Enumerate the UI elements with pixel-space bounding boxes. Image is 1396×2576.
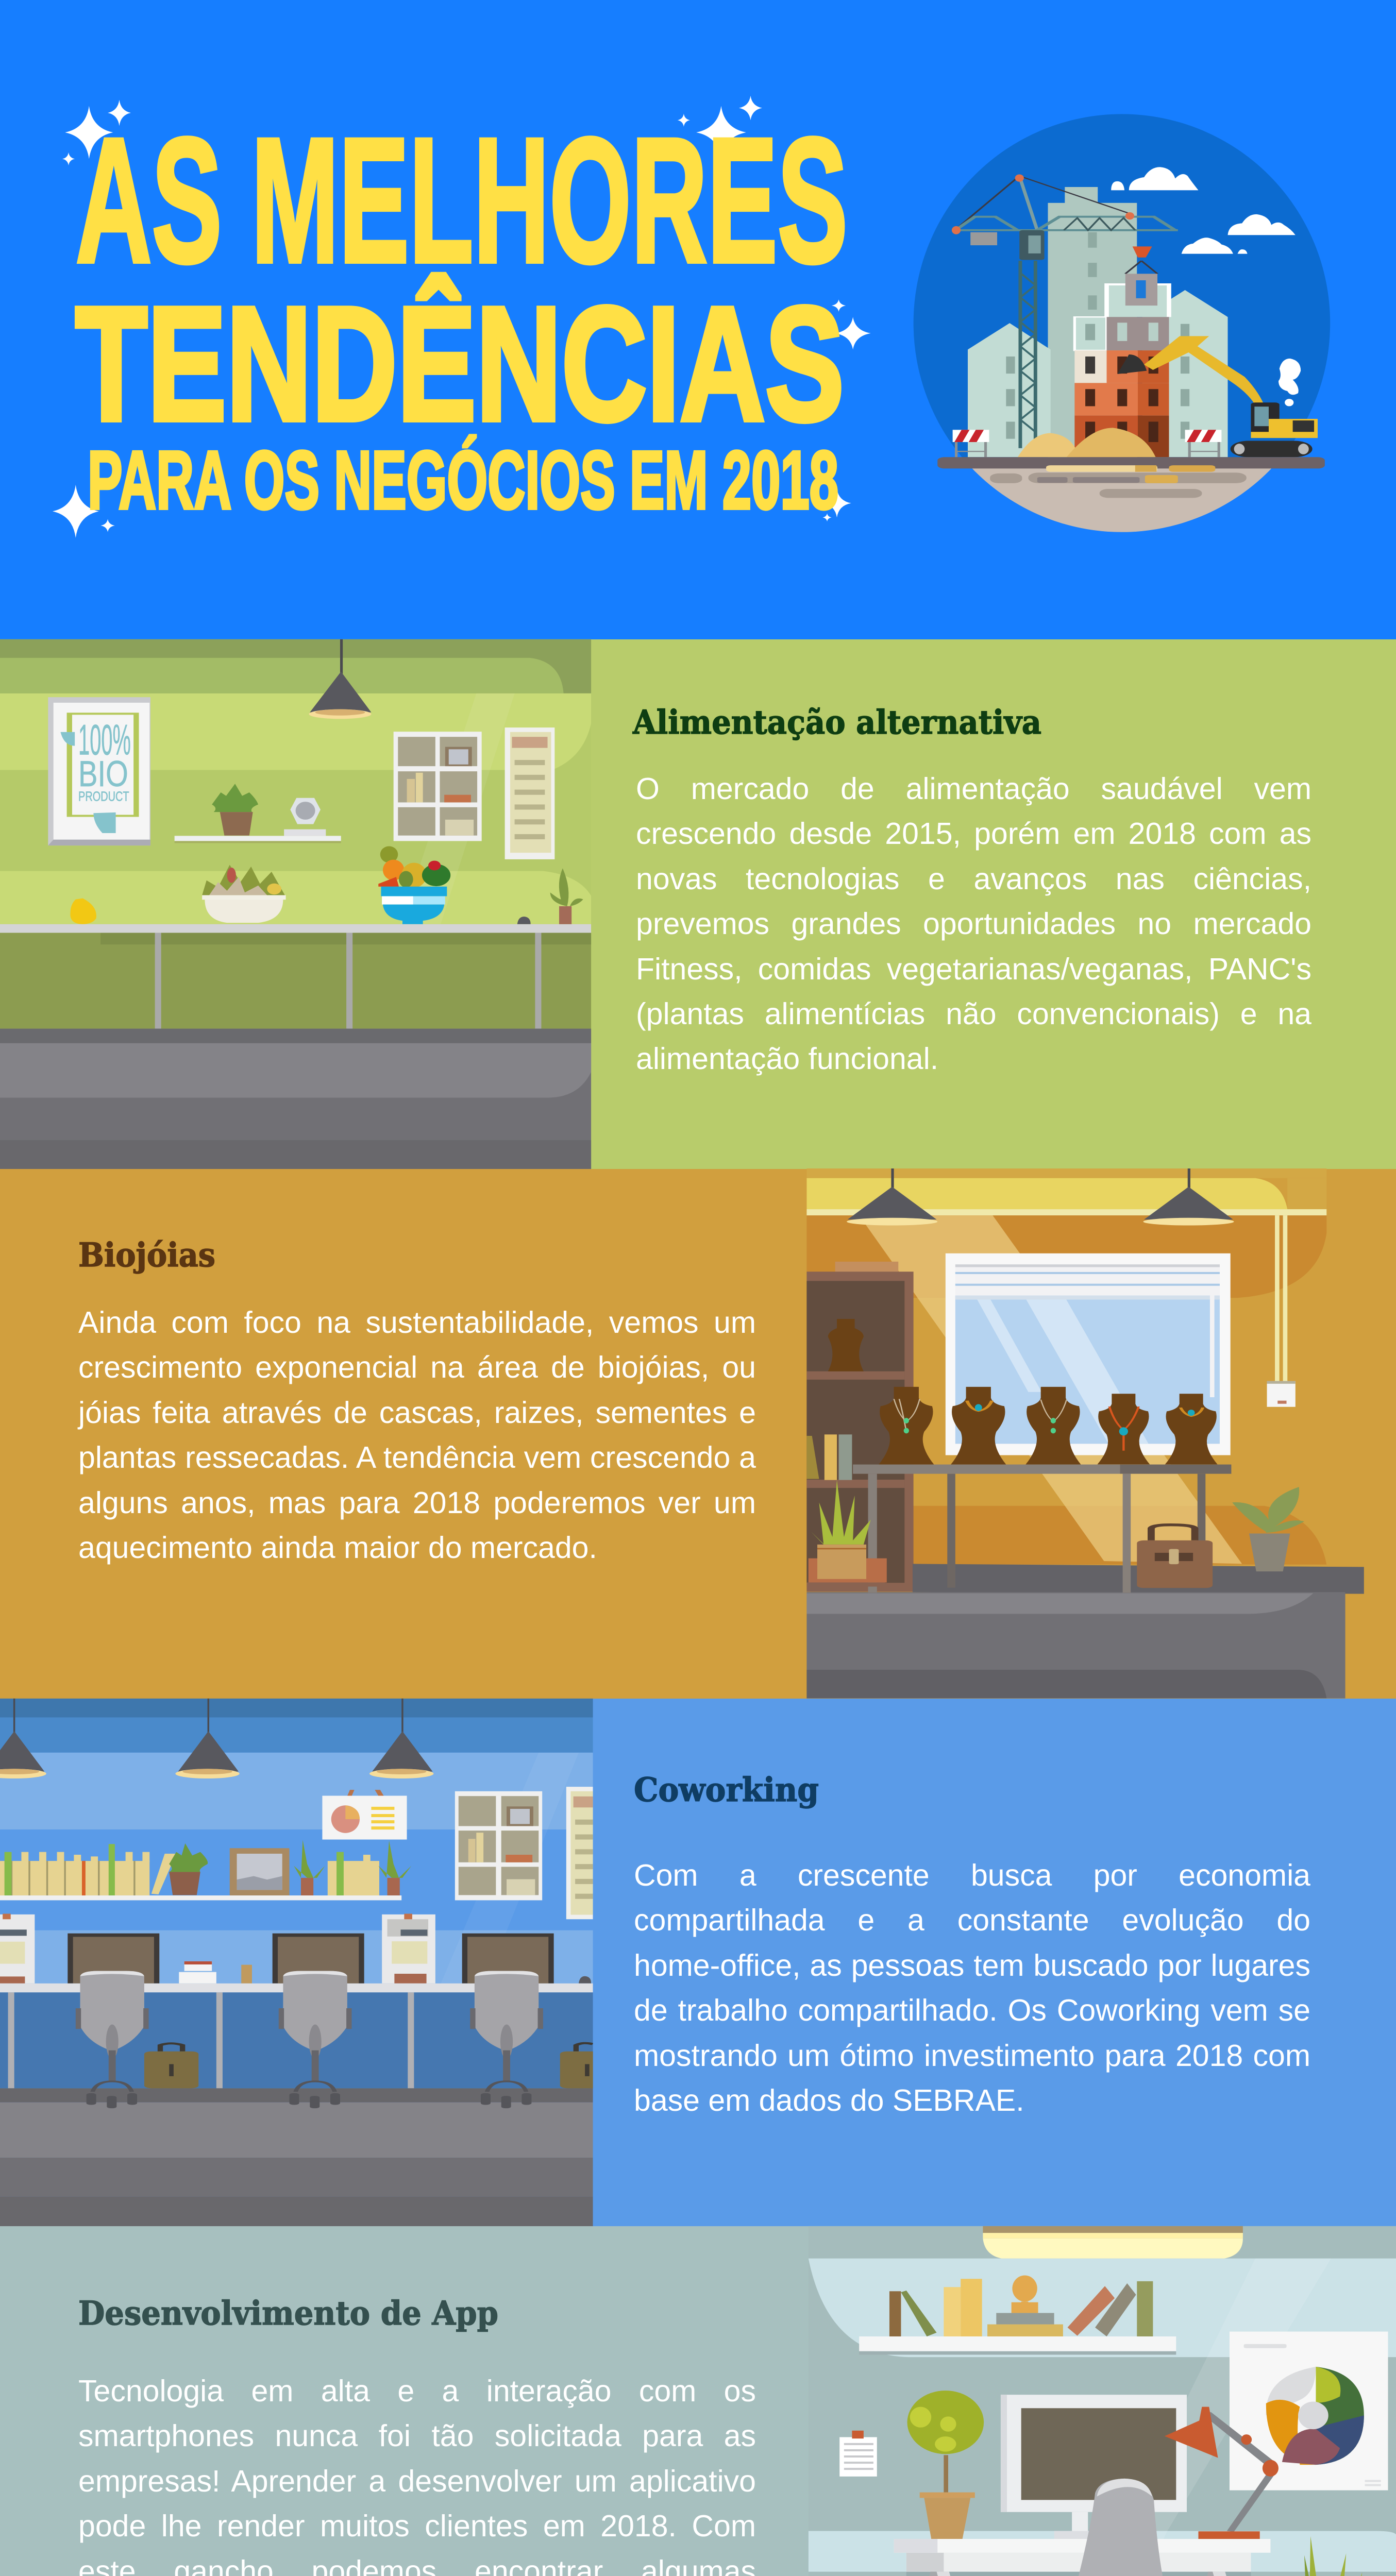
ground platform (937, 457, 1325, 468)
lemon (70, 899, 96, 924)
crane (954, 176, 1178, 448)
chairs (76, 1971, 543, 2108)
title: AS MELHORES (76, 101, 848, 300)
section: Desenvolvimento de App (0, 2226, 1396, 2576)
title: PARA OS NEGÓCIOS EM 2018 (88, 434, 838, 526)
pendant lamp (309, 639, 371, 719)
topiary (907, 2391, 984, 2539)
color wheel poster (1230, 2332, 1388, 2490)
poster: 100% bio product (48, 697, 150, 845)
salad bowl (202, 865, 286, 923)
heading: Desenvolvimento de App: Desenvolvimento de App (78, 2294, 498, 2333)
text block: Coworking: Com a crescente busca por economia (634, 1858, 1310, 1892)
text block: Alimentação alternativa: (plantas alimentícias não convencionais) e na (636, 997, 1311, 1031)
shelf with plant and ornament (175, 784, 341, 843)
heading: Biojóias: Biojóias (78, 1236, 215, 1275)
text block: Coworking: mostrando um ótimo investimento para 2018 com (634, 2039, 1310, 2073)
window (946, 1253, 1231, 1455)
illustration: food counter (0, 639, 591, 1169)
wall chart poster (322, 1790, 407, 1840)
header panel (0, 0, 1396, 639)
illustration: coworking office (0, 1699, 604, 2226)
sand piles (1018, 433, 1079, 457)
section: Coworking (0, 1699, 1396, 2226)
wall shelf (806, 1262, 914, 1592)
text block: Coworking: compartilhada e a constante evolução do (634, 1903, 1310, 1937)
text block: Coworking: home-office, as pessoas tem buscado por lugares (634, 1948, 1310, 1982)
heading: Coworking: Coworking (634, 1771, 819, 1809)
ceiling lamp (983, 2226, 1243, 2259)
construction illustration (914, 114, 1330, 534)
pendant lamps (847, 1168, 1234, 1226)
briefcase (1137, 1525, 1213, 1588)
text block: Alimentação alternativa: Fitness, comidas vegetarianas/veganas, PANC's (636, 952, 1311, 986)
text block: Coworking: de trabalho compartilhado. Os Coworking vem se (634, 1993, 1310, 2027)
clouds (1111, 167, 1301, 406)
white cabinet (455, 1791, 542, 1900)
barriers (953, 430, 1221, 457)
note (839, 2431, 877, 2477)
display table (853, 1465, 1231, 1593)
buildings (1065, 187, 1098, 204)
text block: Biojóias: jóias feita através de cascas, raizes, sementes e (78, 1396, 756, 1430)
text block: Alimentação alternativa: alimentação funcional. (636, 1042, 938, 1076)
illustration: food counter: 100% (78, 716, 131, 764)
text block: Desenvolvimento de App (78, 2374, 756, 2576)
text block: Coworking (634, 1858, 1310, 2117)
text block: Alimentação alternativa: prevemos grandes oportunidades no mercado (636, 907, 1311, 941)
desk lamp (1165, 2407, 1279, 2539)
text block: Alimentação alternativa: crescendo desde 2015, porém em 2018 com as (636, 817, 1311, 851)
text block: Desenvolvimento de App: pode lhe render muitos clientes em 2018. Com (78, 2509, 756, 2543)
illustration: home office (809, 2226, 1396, 2576)
text block: Biojóias: Ainda com foco na sustentabilidade, vemos um (78, 1306, 756, 1340)
text block: Desenvolvimento de App: smartphones nunca foi tão solicitada para as (78, 2419, 756, 2453)
desk (894, 2539, 1271, 2576)
small plant (517, 868, 583, 924)
text block: Alimentação alternativa (636, 772, 1311, 1076)
text block: Alimentação alternativa: novas tecnologias e avanços nas ciências, (636, 862, 1311, 896)
text block: Desenvolvimento de App: Tecnologia em alta e a interação com os (78, 2374, 756, 2408)
wall switch (1267, 1215, 1296, 1407)
monitor (1001, 2395, 1187, 2539)
sparkles around the title (53, 96, 871, 538)
bookshelf (859, 2275, 1176, 2354)
bookshelf (0, 1840, 411, 1900)
title (75, 101, 848, 526)
text block: Desenvolvimento de App: empresas! Aprender a desenvolver um aplicativo (78, 2464, 756, 2498)
desk unit and monitors (0, 1914, 593, 1992)
pendant lamps (0, 1699, 433, 1778)
text block: Biojóias: crescimento exponencial na área de biojóias, ou (78, 1350, 756, 1384)
excavator (1117, 336, 1318, 457)
large plant (1271, 2536, 1375, 2576)
text block: Biojóias: aquecimento ainda maior do mercado. (78, 1531, 597, 1565)
title: TENDÊNCIAS (75, 273, 844, 454)
text block: Coworking: base em dados do SEBRAE. (634, 2083, 1024, 2117)
illustration: food counter: BIO (78, 754, 128, 794)
menu board (505, 727, 554, 859)
text block: Biojóias: plantas ressecadas. A tendência vem crescendo a (78, 1440, 756, 1475)
jewellery busts (879, 1387, 1218, 1465)
bags (144, 2043, 604, 2088)
illustration: food counter: PRODUCT (78, 789, 129, 804)
chair (1024, 2479, 1166, 2576)
section: Biojóias (0, 1168, 1396, 1699)
vase plant (1232, 1487, 1304, 1571)
heading: Alimentação alternativa: Alimentação alternativa (632, 703, 1041, 742)
text block: Biojóias (77, 1306, 756, 1565)
section: Alimentação alternativa (0, 639, 1396, 1169)
menu board (566, 1787, 593, 1919)
text block: Biojóias: alguns anos, mas para 2018 poderemos ver um (78, 1486, 756, 1520)
vegetable bowl (378, 846, 450, 924)
text block: Alimentação alternativa: O mercado de alimentação saudável vem (636, 772, 1311, 806)
floor platform (913, 1564, 1364, 1594)
illustration: jewellery shop (806, 1168, 1364, 1699)
potted grass (806, 1480, 887, 1587)
white cabinet (394, 732, 482, 841)
